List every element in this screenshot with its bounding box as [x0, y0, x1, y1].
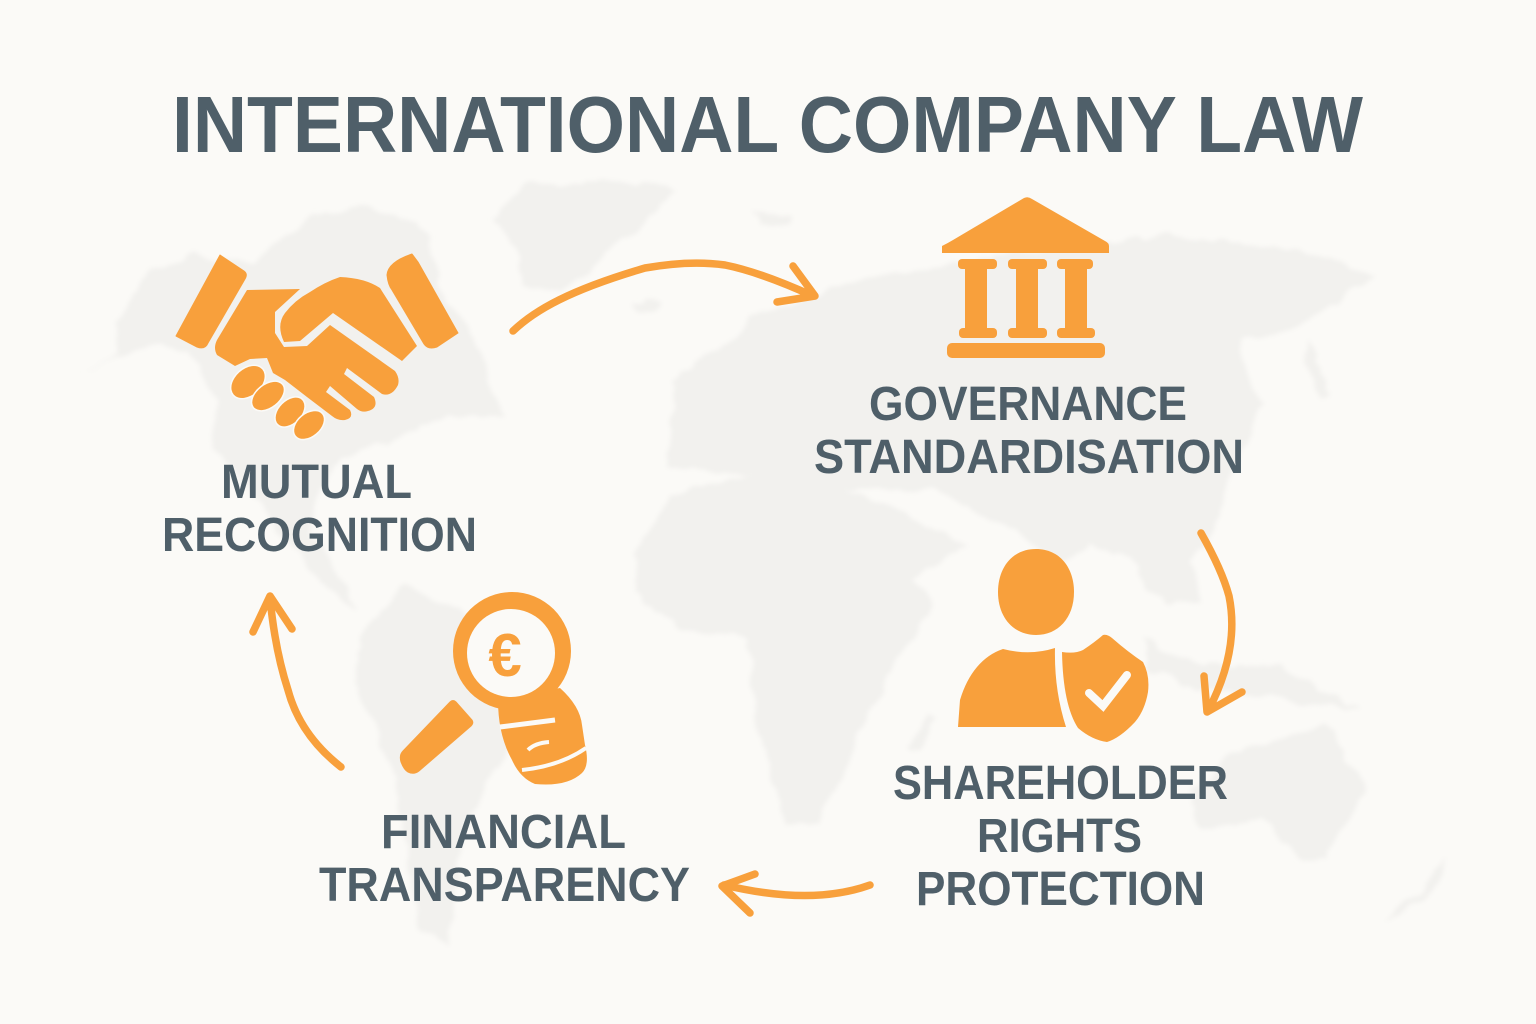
title: INTERNATIONAL COMPANY LAW [172, 80, 1363, 169]
world map background [82, 178, 1448, 945]
label: financial transparency: FINANCIAL [381, 806, 626, 859]
arrow: governance to shareholder [1201, 533, 1242, 712]
arrow: shareholder to financial [722, 874, 870, 913]
label: governance standardisation: STANDARDISATION [814, 431, 1244, 484]
label: shareholder rights protection: RIGHTS [977, 810, 1142, 863]
icon: person with shield [958, 549, 1148, 742]
node: financial transparency [319, 592, 690, 912]
label: mutual recognition: MUTUAL [221, 456, 412, 509]
label: governance standardisation: GOVERNANCE [869, 378, 1187, 431]
arrow: recognition to governance [513, 263, 815, 331]
icon: classical building [942, 197, 1109, 358]
label: mutual recognition [162, 456, 477, 562]
node: mutual recognition [162, 254, 477, 562]
label: financial transparency: TRANSPARENCY [319, 859, 690, 912]
label: shareholder rights protection [893, 757, 1228, 916]
icon: magnifying glass with coin [400, 592, 587, 785]
label: shareholder rights protection: SHAREHOLDER [893, 757, 1228, 810]
arrow: financial to recognition [253, 596, 341, 767]
label: financial transparency [319, 806, 690, 912]
icon: magnifying glass with coin: € [488, 622, 522, 689]
icon: handshake [176, 254, 458, 444]
label: mutual recognition: RECOGNITION [162, 509, 477, 562]
node: shareholder rights protection [893, 549, 1228, 916]
label: governance standardisation [814, 378, 1244, 484]
label: shareholder rights protection: PROTECTION [916, 863, 1205, 916]
node: governance standardisation [814, 197, 1244, 484]
